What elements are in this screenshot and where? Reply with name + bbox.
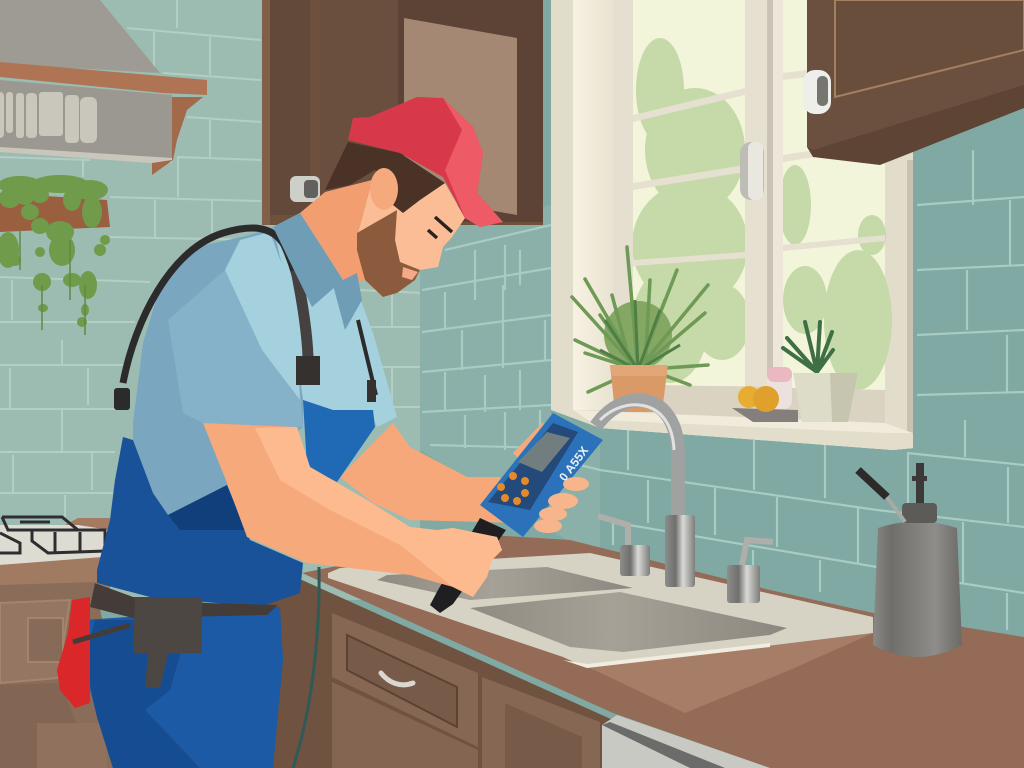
- bib: [303, 400, 375, 482]
- device label: 0 A55X: [556, 444, 591, 484]
- panel: right tiled wall: [420, 0, 1024, 660]
- shirt chest: [273, 213, 397, 427]
- overalls lower: [97, 437, 303, 607]
- tool probe: [430, 518, 506, 613]
- icon: stove: [0, 517, 110, 565]
- arm highlight: [255, 427, 502, 597]
- shoulder strap: [123, 228, 307, 383]
- beard: [357, 210, 420, 297]
- panel: left tiled wall: [0, 0, 425, 600]
- front arm: [203, 423, 502, 597]
- rear arm: [340, 423, 520, 523]
- icon: coil cable: [293, 567, 319, 768]
- neck: [300, 180, 372, 285]
- panel: upper cabinet centre: [262, 0, 543, 225]
- sleeve: [168, 270, 303, 427]
- icon: sink: [328, 553, 873, 668]
- panel: upper cabinet right: [803, 0, 1024, 165]
- trousers: [82, 607, 283, 768]
- mouth area: [402, 267, 418, 280]
- panel: lower cabinets: [0, 558, 770, 768]
- icon: range hood: [0, 0, 207, 175]
- panel: counter top: [0, 518, 1024, 768]
- icon: lemons on plate: [732, 367, 798, 422]
- eye and brow: [428, 217, 452, 238]
- icon: faucet: [596, 400, 773, 603]
- icon: soap bottle / sprayer: [858, 463, 962, 657]
- icon: potted plant on sill: [572, 247, 708, 412]
- icon: hanging plant: [0, 175, 110, 335]
- thumb behind meter: [513, 422, 548, 470]
- belt pouch: [133, 597, 202, 688]
- panel: window: [551, 0, 913, 450]
- cap highlight: [443, 98, 503, 227]
- hair: [325, 142, 445, 213]
- icon: small pot plant: [783, 322, 858, 422]
- icon: handheld meter: [480, 413, 603, 537]
- head: [357, 180, 465, 297]
- red cap: [348, 97, 503, 227]
- collar: [273, 213, 343, 307]
- tool pouch: [57, 597, 90, 708]
- trees outside the window: [632, 38, 892, 390]
- figure: technician: [57, 97, 520, 768]
- shirt back and sleeve: [133, 227, 303, 515]
- belt: [90, 583, 278, 618]
- ear: [370, 168, 398, 210]
- fingers: [534, 477, 589, 533]
